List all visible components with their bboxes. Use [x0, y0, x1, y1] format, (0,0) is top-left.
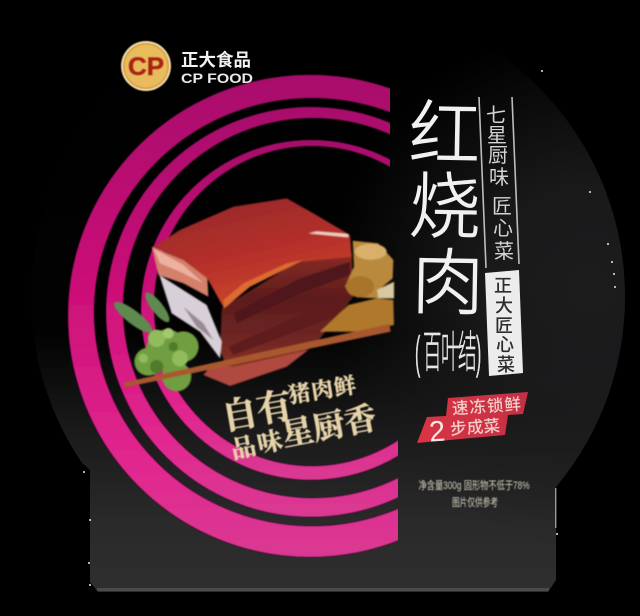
net weight text	[418, 478, 530, 509]
white tag: 正大匠心菜	[485, 270, 523, 376]
gold slogan: 自有猪肉鲜 品味星厨香: 有	[253, 385, 296, 431]
chopstick	[123, 324, 391, 387]
red badge: 速冻锁鲜 2步成菜	[417, 392, 528, 449]
icon: CP badge: CP	[128, 53, 164, 81]
side layers of the pork	[220, 253, 353, 385]
gold slogan: 自有猪肉鲜 品味星厨香: 自	[219, 392, 261, 438]
red badge: 速冻锁鲜 2步成菜: 速冻锁鲜	[451, 395, 522, 418]
red badge: 速冻锁鲜 2步成菜: 2	[428, 416, 446, 449]
vertical slogan: 七星厨味 匠心菜: 星	[487, 125, 507, 147]
tofu knots	[320, 241, 394, 332]
red badge: 速冻锁鲜 2步成菜: 步成菜	[449, 416, 501, 439]
brand name: 正大食品	[181, 50, 251, 70]
package background	[38, 70, 625, 592]
title: 红烧肉	[408, 95, 485, 325]
vertical slogan: 七星厨味 匠心菜: 味	[489, 166, 509, 189]
arc: inner	[140, 139, 398, 481]
subtitle: 百叶结: 叶	[441, 328, 460, 377]
vertical slogan: 七星厨味 匠心菜: 心	[493, 218, 513, 240]
subtitle: 百叶结: 百	[423, 328, 442, 377]
white tag: 正大匠心菜: 大	[495, 296, 513, 316]
title: 红烧肉: 烧	[408, 167, 482, 249]
gold slogan: 自有猪肉鲜 品味星厨香	[219, 373, 379, 465]
gold slogan: 自有猪肉鲜 品味星厨香: 星厨香	[278, 400, 379, 453]
icon: lettuce garnish	[134, 328, 199, 391]
subtitle: 百叶结: (	[415, 328, 421, 379]
package bottom rim	[97, 588, 549, 591]
subtitle: 百叶结: 结	[458, 328, 477, 377]
vertical slogan: 七星厨味 匠心菜	[479, 97, 519, 268]
vertical slogan: 七星厨味 匠心菜: 匠	[492, 196, 512, 218]
white tag: 正大匠心菜: 正	[494, 276, 512, 296]
subtitle: 百叶结: )	[476, 328, 481, 379]
subtitle: 百叶结	[415, 328, 481, 379]
vertical slogan: 七星厨味 匠心菜: 七	[486, 104, 506, 127]
concentric magenta arcs	[67, 74, 398, 558]
pork underside	[203, 350, 308, 386]
gold slogan: 自有猪肉鲜 品味星厨香: 品味	[228, 426, 285, 465]
logo: CP Food	[121, 41, 253, 91]
title: 红烧肉: 肉	[411, 243, 485, 325]
food photo: braised pork	[110, 198, 394, 391]
pork rind edge	[152, 247, 208, 297]
arc: outer	[67, 74, 398, 558]
white tag: 正大匠心菜: 心	[496, 335, 514, 355]
vertical slogan: 七星厨味 匠心菜: 菜	[494, 240, 514, 263]
brand name latin: CP FOOD	[181, 71, 253, 86]
icon: herb leaves	[110, 289, 173, 337]
vertical slogan: 七星厨味 匠心菜: 厨	[488, 145, 508, 167]
white tag: 正大匠心菜: 匠	[495, 316, 513, 336]
title: 红烧肉: 红	[408, 95, 481, 176]
pork top skin	[153, 198, 352, 308]
net weight text: 图片仅供参考	[452, 495, 498, 509]
pork fat side	[159, 275, 222, 358]
gold slogan: 自有猪肉鲜 品味星厨香: 猪肉鲜	[287, 373, 358, 408]
arc: middle	[105, 106, 398, 518]
net weight text: 净含量300g 固形物不低于78%	[418, 478, 530, 492]
white tag: 正大匠心菜: 菜	[497, 355, 515, 375]
